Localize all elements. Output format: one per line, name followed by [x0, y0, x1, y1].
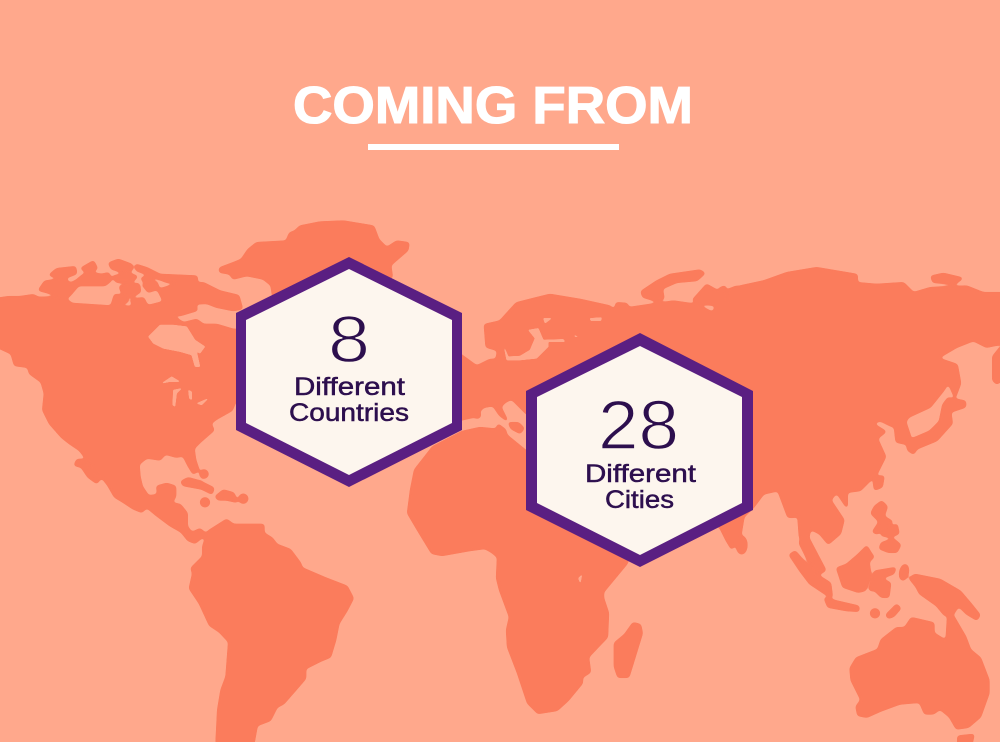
hexagon border — [236, 257, 462, 487]
new guinea — [910, 575, 979, 619]
baja california — [75, 460, 100, 483]
baltic and lake victoria — [504, 318, 602, 583]
eurasia — [458, 268, 1000, 548]
label: countries: Countries — [289, 399, 409, 427]
south america — [190, 520, 353, 742]
inland water — [148, 318, 602, 583]
indonesia and malaysia — [790, 535, 900, 618]
hexagon: different cities — [526, 333, 753, 567]
title: COMING FROM — [293, 77, 693, 135]
baltic and arctic inlets — [504, 318, 602, 360]
landmasses — [0, 222, 1000, 742]
hexagon fill — [246, 269, 452, 475]
number 28: 28 — [598, 386, 679, 464]
label: different: Different — [294, 373, 405, 401]
caribbean islands — [182, 478, 237, 502]
madagascar — [615, 623, 642, 677]
kamchatka — [993, 348, 1000, 383]
hudson bay and great lakes — [148, 325, 208, 407]
mediterranean islands and balkans — [497, 423, 523, 440]
great lakes — [162, 377, 208, 407]
sri lanka — [737, 537, 746, 553]
hexagon border — [526, 333, 753, 567]
americas and greenland — [0, 222, 408, 742]
japan — [907, 398, 965, 453]
world map — [0, 222, 1000, 742]
arctic russia islands — [642, 271, 962, 313]
label: different: Different — [585, 460, 696, 488]
arctic islands — [39, 260, 242, 315]
hexagon: different countries — [236, 257, 462, 487]
hudson bay — [148, 325, 205, 367]
eurasia, oceania — [458, 268, 1000, 742]
taiwan — [874, 477, 883, 489]
label: cities: Cities — [605, 486, 674, 514]
north america — [0, 295, 243, 543]
africa — [408, 428, 640, 713]
greenland — [220, 222, 408, 297]
number 8: 8 — [328, 302, 370, 376]
philippines — [872, 502, 900, 552]
lake victoria — [578, 575, 582, 583]
hexagon fill — [537, 346, 742, 555]
australia — [851, 615, 988, 728]
tasmania — [958, 735, 973, 742]
title underline — [368, 144, 619, 150]
